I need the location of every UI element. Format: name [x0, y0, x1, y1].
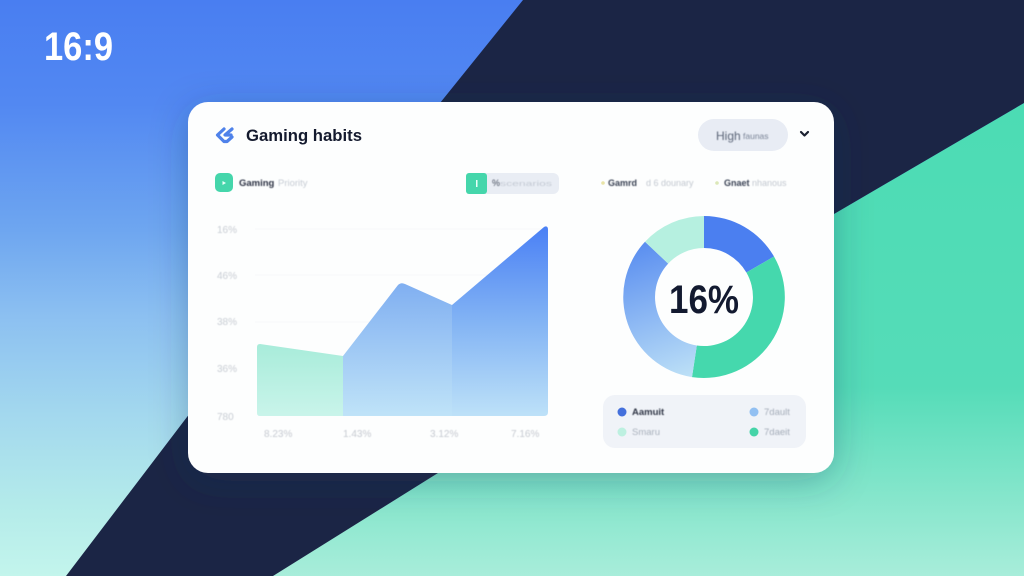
donut legend top [601, 178, 787, 188]
chart legend left: Priority [278, 178, 308, 189]
area: blue segment [452, 226, 548, 416]
aspect ratio label: 16:9 [44, 25, 113, 69]
donut chart [623, 216, 785, 378]
filter pill: faunas [743, 131, 769, 141]
x axis labels: 7.16% [511, 429, 539, 440]
area: mint segment [257, 344, 343, 416]
chart legend left [215, 173, 308, 192]
segment: light gradient [623, 242, 697, 377]
area: light blue segment [343, 283, 452, 416]
y axis labels [217, 225, 237, 423]
panel: dashboard card [188, 102, 834, 473]
filter pill [698, 119, 788, 151]
grid lines [255, 229, 548, 322]
x axis labels: 1.43% [343, 429, 371, 440]
donut legend top: Gnaet [724, 178, 750, 188]
y axis labels: 780 [217, 412, 234, 423]
donut legend top: Gamrd [608, 178, 637, 188]
icon: dropdown chevron [801, 132, 808, 136]
percentage selector [466, 173, 559, 194]
percentage selector: scenarios [500, 179, 552, 188]
donut legend top: d 6 dounary [646, 178, 694, 188]
donut legend panel [603, 395, 806, 448]
y axis labels: 36% [217, 364, 237, 375]
area chart [217, 225, 548, 440]
donut legend top: nhanous [752, 178, 787, 188]
chart legend left: Gaming [239, 178, 275, 189]
y axis labels: 16% [217, 225, 237, 236]
y axis labels: 46% [217, 271, 237, 282]
filter pill: High [716, 129, 741, 143]
x axis labels: 8.23% [264, 429, 292, 440]
x axis labels [264, 429, 539, 440]
percentage selector: % [492, 178, 500, 188]
x axis labels: 3.12% [430, 429, 458, 440]
background: green corner [273, 103, 1024, 576]
donut legend panel: 7dault [764, 407, 790, 418]
y axis labels: 38% [217, 317, 237, 328]
donut legend panel: 7daeit [764, 427, 790, 438]
segment: mint [645, 216, 704, 264]
segment: green [692, 256, 785, 378]
donut legend panel: Aamuit [632, 407, 665, 418]
segment: blue [704, 216, 774, 272]
donut legend panel: Smaru [632, 427, 660, 438]
icon: logo chevrons [218, 129, 232, 142]
title: Gaming habits [246, 126, 362, 145]
donut value: 16% [669, 278, 739, 322]
